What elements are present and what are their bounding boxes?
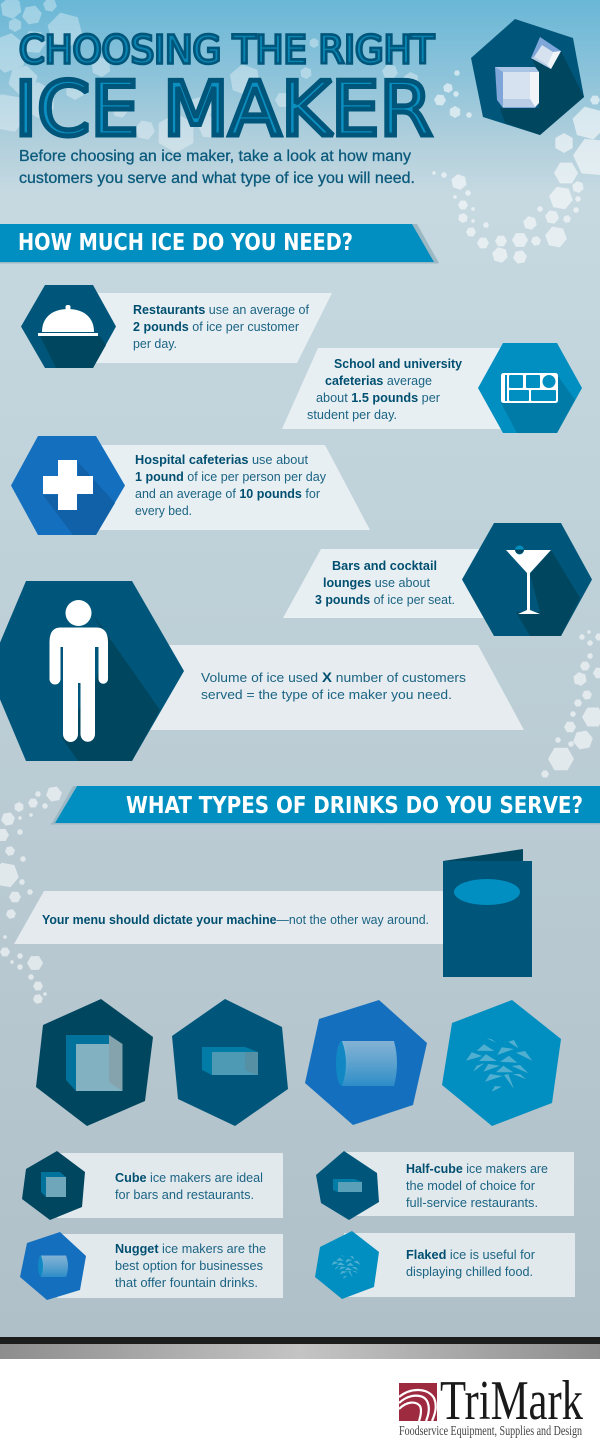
panel: school cafeterias: cafeterias average (325, 373, 432, 388)
decorative ice hexagons mid right (541, 630, 600, 777)
card: cube: Cube ice makers are ideal (115, 1170, 263, 1185)
title: CHOOSING THE RIGHT (19, 28, 435, 72)
card: nugget (20, 1232, 283, 1300)
panel: bars and lounges: Bars and cocktail (332, 558, 437, 573)
icon: medical cross hexagon (11, 436, 125, 535)
panel: hospital cafeterias (11, 436, 370, 535)
card: nugget: Nugget ice makers are the (115, 1241, 266, 1256)
decorative ice hexagons mid left (0, 783, 64, 1006)
card: flaked: Flaked ice is useful for (406, 1247, 536, 1262)
icon: martini hexagon (462, 523, 592, 636)
card: half-cube: the model of choice for (406, 1178, 536, 1193)
panel: hospital cafeterias: and an average of 10 pounds for (135, 486, 321, 501)
panel: school cafeterias (282, 343, 582, 433)
icon: large flaked ice (442, 1000, 561, 1126)
card: nugget: that offer fountain drinks. (115, 1275, 258, 1290)
icon: large cube ice (36, 999, 153, 1126)
banner: how much ice: HOW MUCH ICE DO YOU NEED? (18, 230, 353, 256)
card: half-cube (316, 1151, 574, 1220)
card: half-cube: Half-cube ice makers are (406, 1161, 548, 1176)
decorative ice hexagons top right (432, 70, 600, 266)
title: ICE MAKER (14, 65, 432, 153)
panel: restaurants (21, 285, 332, 368)
card: half-cube: full-service restaurants. (406, 1195, 538, 1210)
panel: hospital cafeterias: 1 pound of ice per person per day (135, 469, 326, 484)
panel: bars and lounges: lounges use about (323, 575, 430, 590)
card: flaked (315, 1231, 575, 1299)
panel: school cafeterias: student per day. (307, 407, 397, 422)
icon: small half-cube (316, 1151, 379, 1220)
panel: menu callout (14, 891, 445, 944)
panel: school cafeterias: School and university (334, 356, 463, 371)
panel: bars and lounges (283, 523, 592, 636)
title (14, 28, 435, 153)
decorative ice hexagons top left (0, 0, 421, 158)
title: CHOOSING THE RIGHT (19, 28, 435, 72)
icon: large half-cube ice (172, 999, 288, 1126)
banner: drinks (51, 786, 600, 825)
panel: school cafeterias: about 1.5 pounds per (316, 390, 441, 405)
icon: person hexagon (0, 581, 184, 761)
title: ICE MAKER (14, 65, 432, 153)
intro text: Before choosing an ice maker, take a look at how many (19, 148, 411, 165)
card: flaked: displaying chilled food. (406, 1264, 533, 1279)
banner: how much ice (0, 224, 439, 264)
card: cube: for bars and restaurants. (115, 1187, 254, 1202)
footer bars (0, 1337, 600, 1454)
intro text (19, 148, 415, 187)
icon: small cube (22, 1151, 85, 1220)
icon: menu (443, 849, 532, 977)
logo mark (399, 1383, 437, 1421)
panel: volume formula (0, 581, 524, 761)
card: cube (22, 1151, 283, 1220)
icon: cloche hexagon (21, 285, 116, 368)
panel: bars and lounges: 3 pounds of ice per seat. (315, 592, 455, 607)
panel: hospital cafeterias: Hospital cafeterias use about (135, 452, 308, 467)
panel: volume formula: served = the type of ice maker you need. (201, 687, 452, 702)
intro text: customers you serve and what type of ice you will need. (19, 170, 415, 187)
panel: restaurants: Restaurants use an average of (133, 302, 309, 317)
panel: hospital cafeterias: every bed. (135, 503, 192, 518)
icon: tray hexagon (478, 343, 582, 433)
panel: menu callout: Your menu should dictate your machine—not the other way around. (42, 912, 429, 927)
logo: TriMark (399, 1370, 583, 1438)
icon: small flaked (315, 1231, 379, 1299)
icon: small nugget (20, 1232, 86, 1300)
panel: volume formula: Volume of ice used X number of customers (201, 669, 467, 685)
panel: restaurants: 2 pounds of ice per customer (133, 319, 300, 334)
card: nugget: best option for businesses (115, 1258, 263, 1273)
panel: restaurants: per day. (133, 336, 177, 351)
icon: ice cubes (471, 19, 584, 135)
icon: large nugget ice (305, 1000, 427, 1125)
